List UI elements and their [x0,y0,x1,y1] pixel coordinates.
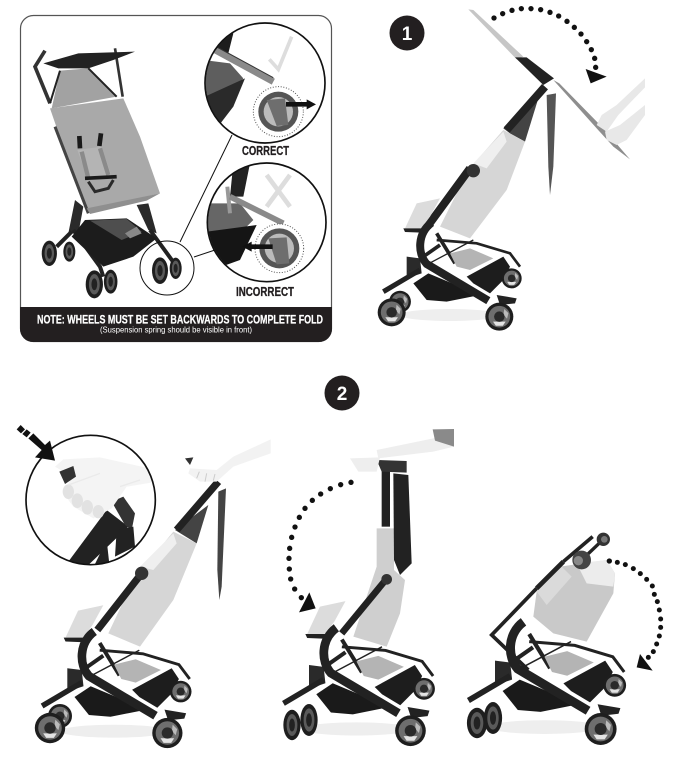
arrow: step 1 dotted arc [491,6,607,83]
detail circle on wheels [140,241,194,295]
arrow: press down [17,425,55,461]
detail: correct wheel [203,23,325,143]
step badge 1 [390,16,424,50]
stroller front view [35,48,182,298]
arrow: wheel outward [286,99,316,109]
upper seat and handle [97,439,271,647]
step 1: stroller with canopy folding [378,9,645,331]
arrow: step 2b dotted arc [286,480,354,612]
mesh pocket [503,98,538,142]
detail: incorrect wheel [203,163,326,282]
canopy bar [468,9,523,59]
step badge 2 [324,376,360,410]
detail: hand pressing handle [26,435,157,567]
icon: cross mark [267,175,290,207]
note subtext: (Suspension spring should be visible in front) [100,326,252,334]
hands [597,78,645,145]
step 2b: stroller with handle folded down [283,429,454,746]
step 2a: stroller with handle pressed [35,439,271,748]
strap [547,93,556,195]
step badge 2: 2 [337,384,347,405]
step badge 1: 1 [402,24,413,45]
arrow: wheel inward [242,242,273,252]
step 3: stroller folding forward [467,533,626,745]
leader lines [180,135,232,257]
note heading: NOTE: WHEELS MUST BE SET BACKWARDS TO COMPLETE FOLD [37,312,323,326]
fabric seat [440,130,525,238]
upper folded frame and hand [342,429,454,647]
backrest tube [427,87,545,227]
icon: check mark [269,37,292,69]
note banner [20,307,332,342]
label: correct: CORRECT [242,144,289,158]
arrow: step 3 dotted arc [607,558,663,671]
upper folded seat [492,533,615,670]
panel: wheel position note [20,16,332,342]
label: incorrect: INCORRECT [236,285,294,299]
